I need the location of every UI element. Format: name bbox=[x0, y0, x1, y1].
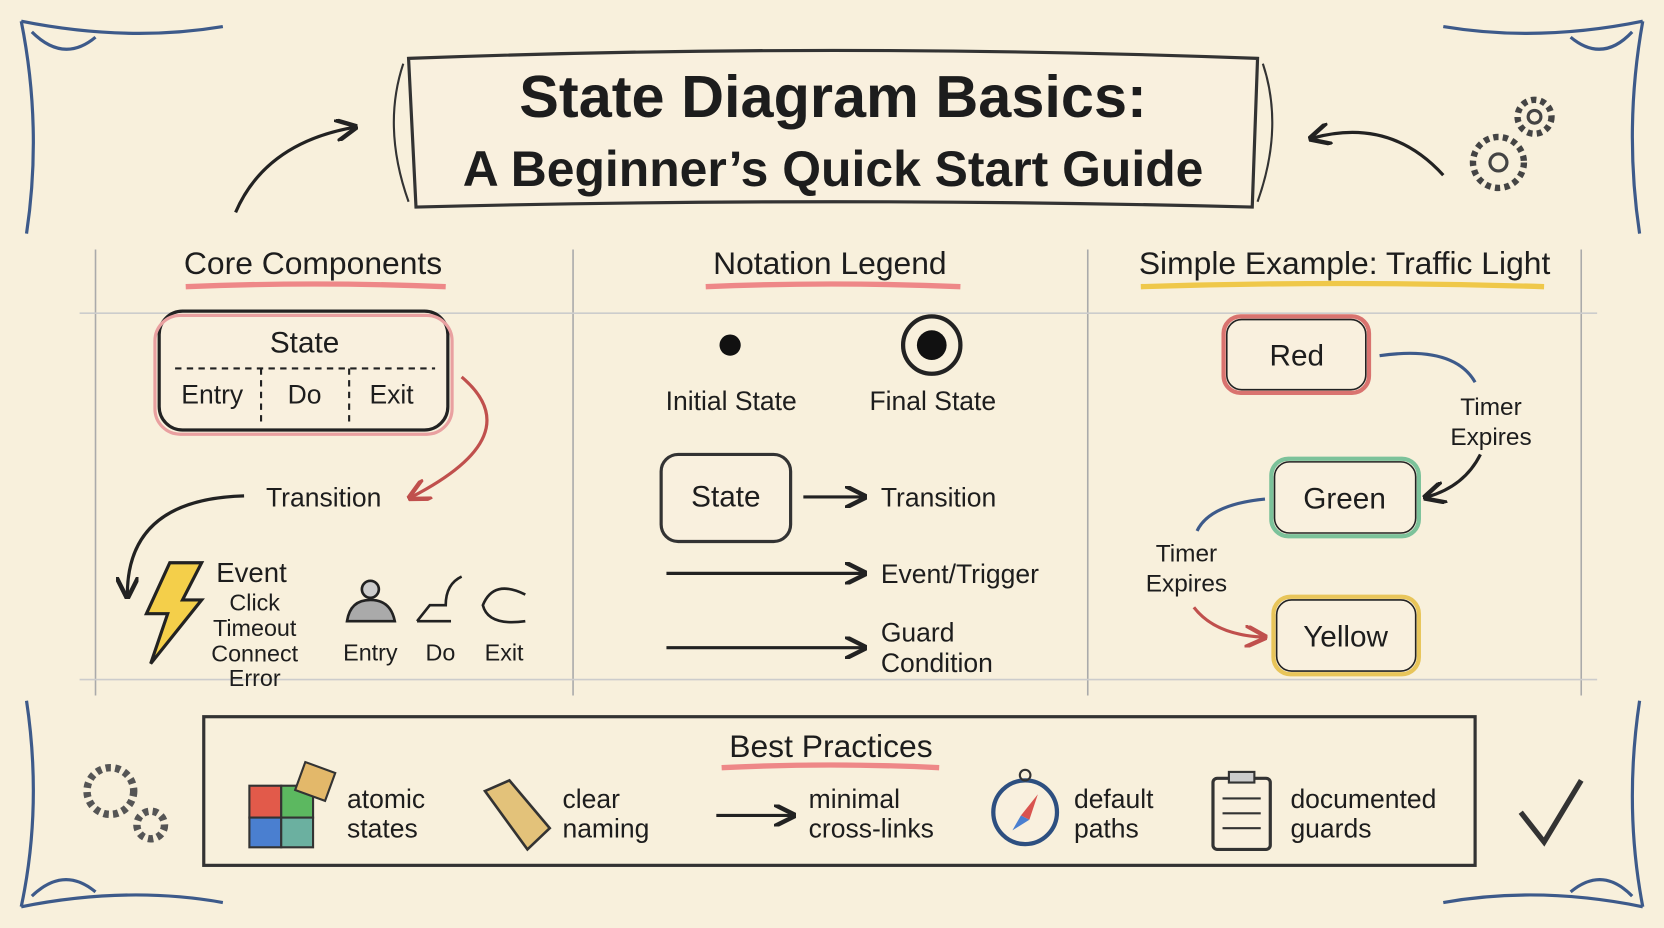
panel: notation legend: Event/Trigger bbox=[881, 559, 1039, 589]
state box bbox=[155, 311, 452, 434]
panel: traffic light: Expires bbox=[1146, 570, 1227, 597]
icon: puzzle bbox=[249, 762, 335, 847]
state symbol bbox=[661, 454, 791, 542]
arrow: transition to event bbox=[127, 496, 244, 595]
event list: Timeout bbox=[213, 615, 297, 641]
panel: best practices: minimal bbox=[809, 784, 900, 814]
panel: notation legend bbox=[661, 245, 1039, 678]
title banner: State Diagram Basics: bbox=[519, 63, 1147, 130]
event list: Error bbox=[229, 665, 281, 691]
panel: best practices: clear bbox=[562, 784, 620, 814]
state: red: Red bbox=[1270, 339, 1324, 372]
panel: best practices: states bbox=[347, 814, 418, 844]
state: yellow: Yellow bbox=[1303, 621, 1389, 654]
arrow: top left bbox=[236, 127, 353, 212]
panel: best practices: paths bbox=[1074, 814, 1139, 844]
panel: core components: Entry bbox=[343, 639, 398, 665]
state box: Do bbox=[288, 379, 322, 409]
heading: best practices: Best Practices bbox=[729, 728, 933, 764]
transition arrows bbox=[666, 497, 863, 648]
panel: traffic light: Timer bbox=[1156, 541, 1217, 568]
state box: Exit bbox=[369, 379, 414, 409]
panel: core components: Do bbox=[425, 639, 455, 665]
icon: gears top right bbox=[1473, 100, 1552, 188]
event list: Connect bbox=[211, 640, 299, 666]
heading: core components: Core Components bbox=[184, 245, 442, 281]
state box: Entry bbox=[181, 379, 244, 409]
title banner bbox=[394, 50, 1272, 207]
state: red bbox=[1224, 316, 1369, 393]
arrow: transition loop bbox=[412, 377, 487, 497]
panel: notation legend: Initial State bbox=[666, 386, 797, 416]
panel: notation legend: Transition bbox=[881, 482, 996, 512]
panel: best practices: default bbox=[1074, 784, 1154, 814]
state symbol: State bbox=[691, 480, 761, 513]
icon: entry person bbox=[347, 581, 395, 621]
panel: notation legend: Final State bbox=[869, 386, 996, 416]
panel: best practices: naming bbox=[562, 814, 649, 844]
panel: best practices: atomic bbox=[347, 784, 425, 814]
panel: traffic light: Expires bbox=[1450, 424, 1532, 451]
icon: gears bottom left bbox=[87, 768, 164, 839]
event list: Click bbox=[229, 590, 280, 616]
panel: notation legend: Condition bbox=[881, 648, 993, 678]
icon: checkmark bbox=[1521, 780, 1581, 842]
panel: notation legend: Guard bbox=[881, 617, 954, 647]
icon: lightning bbox=[146, 563, 202, 664]
heading: notation legend: Notation Legend bbox=[713, 245, 947, 281]
panel: best practices: documented bbox=[1290, 784, 1436, 814]
state: green bbox=[1271, 459, 1419, 536]
heading: traffic light: Simple Example: Traffic Light bbox=[1139, 245, 1550, 281]
icon: tag bbox=[485, 780, 550, 849]
final state bbox=[903, 316, 960, 374]
panel: best practices: cross-links bbox=[809, 814, 934, 844]
dividers bbox=[80, 250, 1597, 695]
icon: compass bbox=[993, 770, 1057, 844]
panel: traffic light: Timer bbox=[1460, 394, 1522, 421]
panel: core components bbox=[127, 245, 525, 691]
event list: Event bbox=[216, 557, 287, 588]
arrow: top right bbox=[1313, 132, 1443, 175]
icon: clipboard bbox=[1213, 772, 1270, 849]
icon: arrow bbox=[716, 814, 792, 817]
label: transition: Transition bbox=[266, 482, 381, 512]
icon: do bbox=[417, 577, 462, 621]
icon: exit bbox=[483, 589, 525, 622]
state: yellow bbox=[1273, 597, 1419, 674]
panel: traffic light bbox=[1139, 245, 1550, 674]
state: green: Green bbox=[1303, 483, 1386, 516]
title banner: A Beginner’s Quick Start Guide bbox=[463, 141, 1203, 197]
panel: core components: Exit bbox=[485, 639, 524, 665]
event list bbox=[211, 557, 299, 691]
state box: State bbox=[270, 327, 339, 360]
panel: best practices: guards bbox=[1290, 814, 1372, 844]
panel: best practices bbox=[204, 717, 1475, 865]
initial state bbox=[720, 334, 741, 356]
